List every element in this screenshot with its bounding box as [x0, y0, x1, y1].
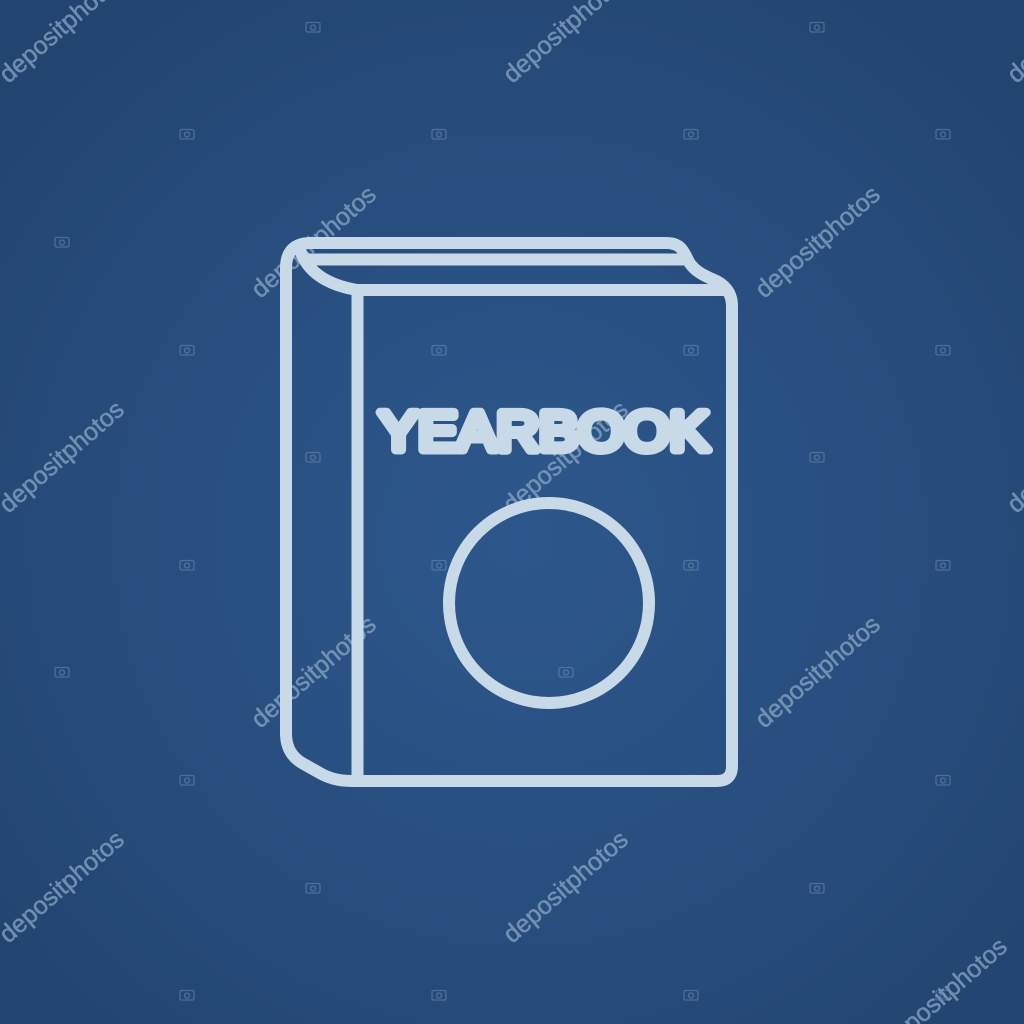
spine divider — [352, 290, 364, 781]
watermark text: depositphotos — [498, 395, 634, 519]
pages top line — [302, 254, 684, 266]
watermark text: depositphotos — [750, 180, 886, 304]
cover circle — [449, 503, 649, 703]
watermark text: depositphotos — [498, 825, 634, 949]
watermark text: depositphotos — [246, 610, 382, 734]
book outline — [286, 243, 732, 781]
title: YEARBOOK: YEARBOOK — [379, 400, 709, 462]
watermark text: depositphotos — [246, 180, 382, 304]
cover top edge with curve — [300, 250, 728, 290]
watermark text: depositphotos — [750, 610, 886, 734]
icon: yearbook — [286, 243, 732, 781]
